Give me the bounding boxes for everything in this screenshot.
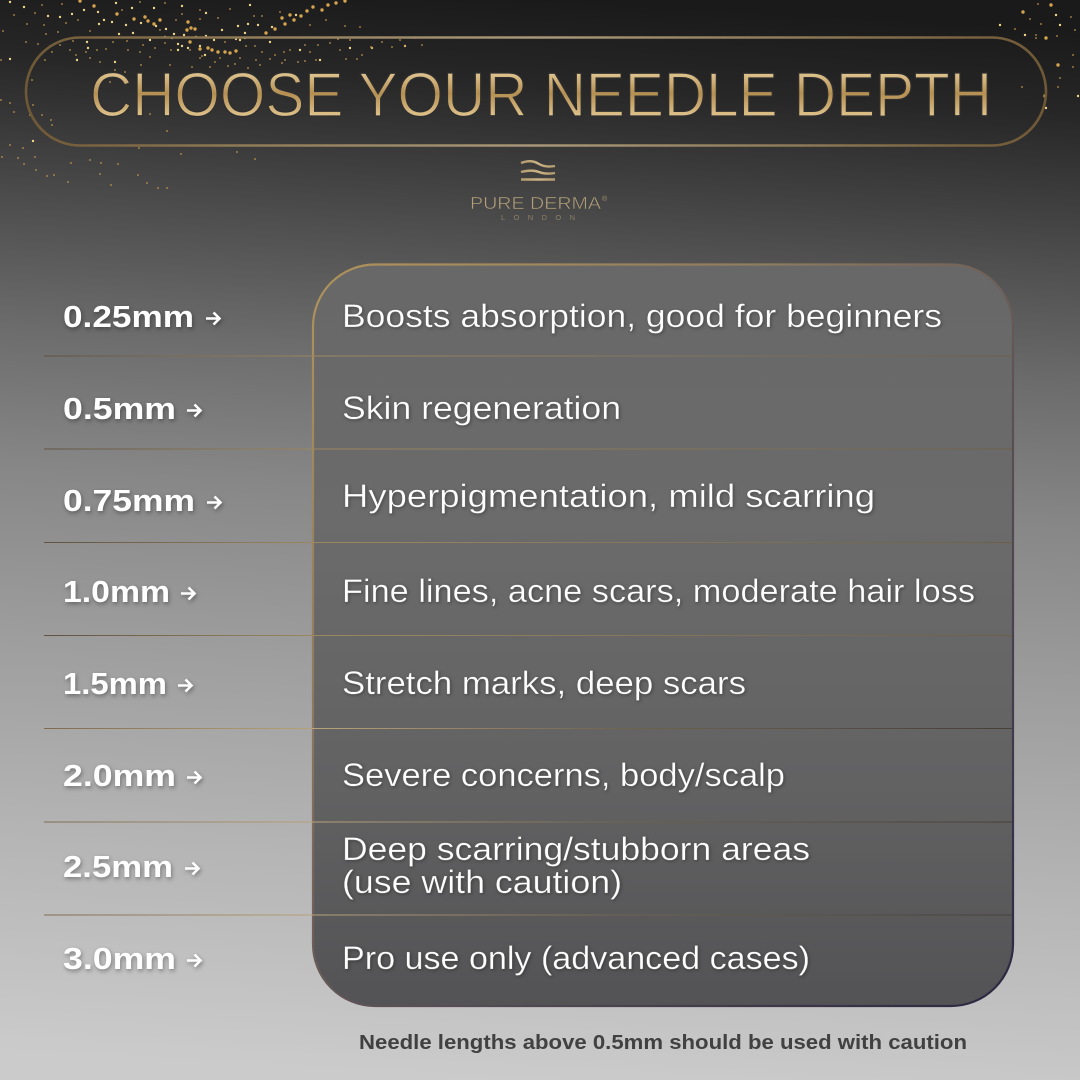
row: 0.25mm: Boosts absorption, good for beginners [342, 298, 942, 334]
row: 0.25mm: 0.25mm [63, 299, 194, 334]
row: 2.0mm: Severe concerns, body/scalp [342, 757, 785, 793]
row: 3.0mm: Pro use only (advanced cases) [342, 940, 810, 976]
row: 2.0mm: 2.0mm [63, 758, 176, 793]
brand name: PURE DERMA [470, 193, 601, 213]
row: 1.5mm [63, 665, 746, 701]
gold sparkle dust [1, 1, 1078, 188]
title: CHOOSE YOUR NEEDLE DEPTH [90, 61, 992, 130]
row: 1.0mm: 1.0mm [63, 574, 170, 609]
row: 2.5mm [63, 831, 810, 900]
row: 0.5mm: 0.5mm [63, 391, 176, 426]
row: 1.5mm: 1.5mm [63, 666, 167, 701]
row dividers [44, 356, 1012, 915]
row: 3.0mm [63, 940, 810, 976]
row: 0.75mm: 0.75mm [63, 483, 195, 518]
icon: waves [521, 161, 555, 180]
row: 1.0mm [63, 573, 975, 609]
row: 0.75mm: Hyperpigmentation, mild scarring [342, 478, 875, 514]
row: 2.5mm: (use with caution) [342, 864, 622, 900]
footnote: Needle lengths above 0.5mm should be used with caution [359, 1032, 967, 1054]
row: 1.0mm: Fine lines, acne scars, moderate hair loss [342, 573, 975, 609]
row: 2.0mm [63, 757, 785, 793]
registered mark: ® [602, 195, 608, 203]
row: 0.75mm [63, 478, 875, 518]
row: 3.0mm: 3.0mm [63, 941, 176, 976]
row: 2.5mm: 2.5mm [63, 849, 173, 884]
title pill [26, 38, 1046, 146]
row: 2.5mm: Deep scarring/stubborn areas [342, 831, 810, 867]
pill outline [26, 38, 1046, 146]
panel: descriptions [313, 264, 1013, 1006]
row: 1.5mm: Stretch marks, deep scars [342, 665, 746, 701]
row: 0.5mm [63, 390, 621, 426]
row: 0.5mm: Skin regeneration [342, 390, 621, 426]
logo: Pure Derma London [470, 161, 608, 222]
row: 0.25mm [63, 298, 942, 334]
location: LONDON [501, 213, 575, 222]
